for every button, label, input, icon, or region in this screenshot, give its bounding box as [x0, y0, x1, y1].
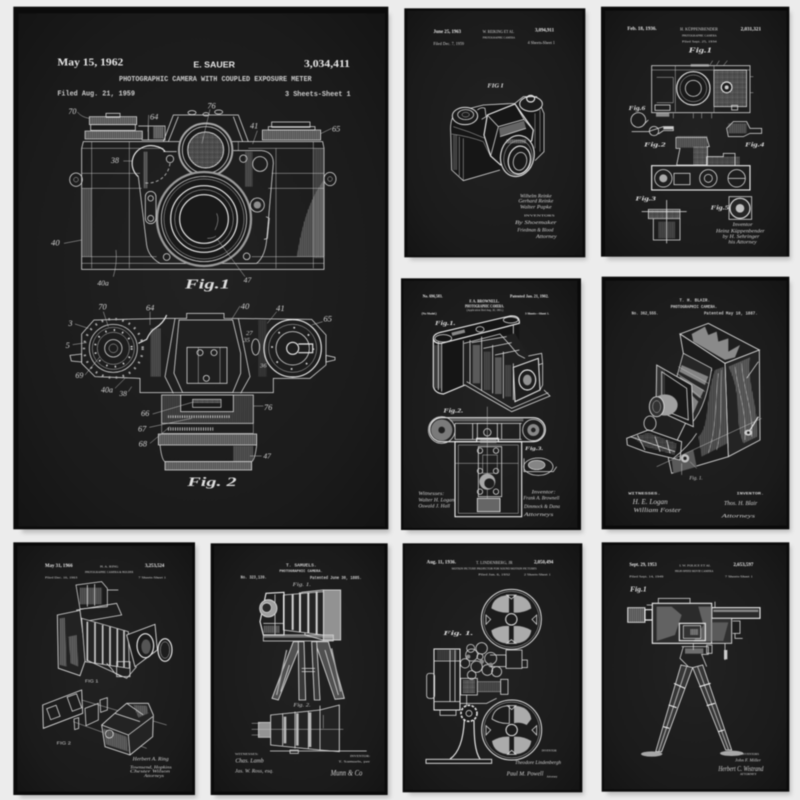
witnesses and inventor signatures: WITNESSES:: [235, 752, 258, 756]
top viewfinder: [76, 582, 122, 622]
poster: Reinke camera patent: [404, 8, 585, 257]
poster background: [405, 545, 580, 790]
patent header: 3,094,911: [535, 29, 554, 34]
figure 5 and inventor: Inventor: [731, 223, 753, 228]
figure 5 and inventor: Heinz Küppenbender: [715, 229, 765, 234]
patent header: T. SAMUELS.: [286, 562, 317, 568]
box camera drawing: [627, 323, 762, 481]
figure 1 callouts: 40a: [97, 278, 109, 287]
patent header: 2,050,494: [534, 560, 554, 565]
patent header: [241, 562, 362, 588]
patent header: [632, 297, 758, 317]
poster: Samuels tripod camera patent: [211, 543, 388, 795]
patent header: 3 Sheets-Sheet 1: [285, 91, 351, 99]
figure 1: folding camera: [433, 316, 550, 412]
figure 2 caption: Fig. 2: [186, 475, 238, 489]
witnesses and inventor signatures: Inventor:: [530, 489, 556, 495]
figure 2: camera section: [252, 703, 367, 753]
figure 2: top section: Fig.2.: [443, 409, 464, 415]
figure 2 callouts: 64: [146, 304, 154, 313]
poster background: [407, 11, 583, 256]
witnesses and inventor signatures: Chas. Lamb: [235, 758, 264, 765]
patent header: 3,253,524: [145, 564, 165, 569]
figure 2 callouts: 38: [118, 389, 127, 398]
rear housing: [102, 703, 153, 755]
film advance dial: [84, 319, 143, 378]
rewind dial top: [264, 320, 321, 377]
patent header: T. LINDENBERG, JR: [476, 561, 513, 566]
patent header: Filed Aug. 21, 1959: [57, 90, 135, 98]
front plate: [138, 151, 273, 263]
figure 4 part: Fig.4: [745, 142, 765, 149]
patent header: (No Model.): [422, 312, 437, 316]
patent header: PHOTOGRAPHIC CAMERA: [483, 36, 515, 40]
poster frame: [13, 7, 388, 529]
poster: Blair box camera patent: [602, 277, 789, 529]
figure 2 callouts: 66: [141, 409, 150, 418]
figure 2 callouts: 40a: [101, 386, 113, 395]
plate screws and controls: [145, 155, 269, 260]
top film reel: [481, 589, 541, 649]
figure 2 callouts: 36: [259, 363, 267, 370]
pull-out drawer: [627, 416, 682, 460]
pedestal and base: [426, 705, 492, 763]
patent header: I. W. POLICE ET AL: [679, 563, 711, 567]
patent header: MOTION PICTURE PROJECTOR FOR SOUND MOTION PICTURES: [452, 567, 537, 571]
patent header: Patented June 30, 1885.: [310, 576, 362, 581]
signatures: John F. Miller: [735, 758, 761, 763]
poster frame: [211, 543, 388, 795]
patent header: E. SAUER: [193, 59, 235, 69]
patent header: PHOTOGRAPHIC CAMERA.: [465, 304, 504, 308]
figure 2: top assembly: Fig.2: [644, 142, 667, 149]
patent header: PHOTOGRAPHIC CAMERA.: [671, 305, 717, 310]
figure 6 part: Fig.6: [629, 105, 646, 112]
patent header: 2 Sheets-Sheet 1: [524, 572, 551, 576]
movie camera body: [628, 598, 760, 757]
figure 2 callouts: 70: [98, 302, 107, 311]
figure 1: camera front view: [70, 110, 336, 269]
figure 2 callouts: 69: [75, 371, 83, 380]
patent header: [627, 27, 762, 55]
upper lens assembly: [490, 650, 527, 668]
prism faceplate: [484, 104, 533, 165]
sprocket cluster: [460, 643, 502, 679]
patent header: [427, 560, 554, 577]
witnesses and inventor signatures: Attorneys: [523, 512, 553, 518]
figure 1 callouts: [51, 101, 340, 287]
poster background: [17, 546, 192, 792]
figure 1: press camera: FIG 1: [85, 679, 99, 685]
figure 2 callouts: 5: [66, 341, 70, 350]
patent header: June 25, 1963: [433, 30, 461, 35]
figure 3: lens section: Fig.3: [635, 196, 657, 203]
exposure meter honeycomb: [179, 123, 232, 177]
viewfinder housing: [163, 110, 248, 151]
lamp house: [427, 649, 460, 715]
witnesses and inventor signatures: [235, 752, 371, 778]
bellows: [82, 618, 129, 668]
poster frame: [602, 542, 789, 792]
figure 2: top section: [428, 409, 545, 443]
lens barrel top view: [158, 395, 257, 470]
right rewind dial: [262, 122, 321, 140]
right dial: [520, 95, 542, 111]
patent header: H. KÜPPENBENDER: [680, 27, 719, 32]
box front with wood grain: [668, 334, 728, 473]
figure 1 callouts: 65: [332, 124, 340, 133]
patent header: [433, 29, 555, 89]
figure 2 callouts: 27: [246, 330, 253, 337]
patent header: Aug. 11, 1936.: [427, 560, 457, 565]
figure 3: lens section: [635, 196, 687, 243]
signatures: Wilhelm Reinke: [520, 194, 552, 199]
poster frame: [601, 7, 789, 257]
patent header: No. 362,555.: [632, 311, 658, 317]
patent header: 4 Sheets-Sheet 1: [528, 41, 555, 45]
signatures: Herbert A. Ring: [132, 758, 169, 763]
patent header: FIG I: [487, 83, 504, 89]
patent header: Fig.1: [630, 585, 647, 594]
signatures: Friedman & Blood: [516, 228, 554, 233]
figure 4 part: [727, 122, 765, 149]
box top with wood grain: [680, 323, 759, 363]
witnesses and inventor signatures: T. Samuels, per: [338, 759, 371, 764]
witnesses and inventor signatures: WITNESSES.: [628, 493, 661, 497]
signatures: [130, 758, 172, 778]
signatures: ATTORNEY: [740, 773, 757, 776]
patent header: Feb. 18, 1936.: [627, 27, 657, 32]
front standard and lens: [260, 592, 284, 635]
lens: [497, 132, 538, 180]
patent header: PHOTOGRAPHIC CAMERA & HOLDER: [85, 570, 133, 574]
patent header: [422, 294, 549, 316]
signatures: Gerhard Reinke: [518, 200, 554, 205]
figure 1 callouts: 64: [150, 112, 158, 121]
witnesses and inventor signatures: INVENTOR:: [350, 754, 370, 758]
witnesses and inventor signatures: Thos. H. Blair: [724, 500, 758, 507]
projector mechanism: [426, 631, 527, 763]
witnesses and inventor signatures: H. E. Logan: [632, 497, 668, 506]
figure 1 callouts: 70: [68, 107, 76, 116]
patent header: May 31, 1966: [45, 564, 73, 569]
figure 5 and inventor: by H. Sehringer: [723, 235, 760, 240]
patent header: (Application filed Aug. 20, 1901.): [467, 308, 503, 313]
patent header: [57, 57, 351, 99]
patent header: [45, 564, 166, 581]
patent header: Patented Jan. 21, 1902.: [510, 294, 549, 299]
patent header: No. 323,139.: [241, 576, 267, 581]
witnesses and inventor signatures: Jas. W. Ross, esq.: [235, 768, 273, 774]
lens barrel: [628, 608, 652, 622]
figure 4: detail: Fig.3.: [525, 446, 543, 452]
signatures: INVENTORS: [742, 753, 760, 756]
patent header: PHOTOGRAPHIC CAMERA: [682, 33, 717, 37]
poster frame: [602, 277, 789, 529]
signatures: Chester Wilson: [130, 769, 170, 774]
signatures: Attorney: [547, 775, 558, 779]
poster: E. Sauer camera patent: [13, 7, 388, 529]
signatures: Paul M. Powell: [506, 771, 544, 778]
signatures: INVENTORS: [524, 214, 555, 218]
witnesses and inventor signatures: Oswald J. Hall: [418, 504, 451, 509]
folding bed: [465, 382, 550, 412]
patent header: May 15, 1962: [57, 57, 124, 69]
patent header: PHOTOGRAPHIC CAMERA.: [279, 570, 323, 574]
tripod right leg: [693, 665, 743, 756]
front standard and lens: [649, 365, 693, 427]
patent header: HIGH-SPEED MOVIE CAMERA: [675, 569, 714, 573]
figure 1 callouts: 41: [250, 121, 258, 130]
witnesses and inventor signatures: William Foster: [633, 508, 682, 514]
figure 2: camera section: Fig. 2.: [292, 703, 311, 709]
patent header: F. A. BROWNELL.: [469, 298, 499, 303]
patent header: No. 696,583.: [423, 294, 443, 299]
figure 5 and inventor: [711, 197, 765, 245]
patent header: Filed Dec. 16, 1963: [45, 576, 78, 581]
patent header: Filed Dec. 7, 1959: [433, 42, 464, 47]
figure 2 callouts: 68: [139, 440, 148, 449]
figure 1 callouts: 38: [110, 156, 119, 165]
figure 5 and inventor: his Attorney: [728, 240, 758, 245]
bottom film reel: [482, 700, 542, 760]
tripod head: [680, 643, 712, 667]
poster background: [403, 281, 577, 528]
tripod left leg: [641, 665, 693, 757]
figure 2 callouts: 41: [276, 303, 285, 313]
signatures: Townsend, Hopkins: [130, 764, 172, 770]
poster: Lindenberg film projector patent: [403, 543, 582, 792]
signatures: Attorney: [535, 234, 557, 240]
signatures: [515, 194, 557, 240]
poster frame: [403, 543, 582, 792]
patent header: T. H. BLAIR.: [679, 297, 710, 303]
signatures: Herbert C. Wistrand: [718, 764, 764, 773]
figure 1 caption: Fig.1: [183, 277, 230, 292]
handle loop: [132, 146, 165, 177]
signatures: [506, 750, 561, 779]
patent header: Fig. 1.: [291, 582, 311, 588]
witnesses and inventor signatures: Walter H. Logan: [418, 498, 455, 504]
figure 4: detail: [524, 446, 557, 475]
main housing: [647, 598, 743, 660]
figure 2 callouts: 35: [242, 337, 251, 344]
patent header: Patented May 10, 1887.: [704, 311, 758, 317]
poster background: [605, 281, 787, 526]
figure 1 callouts: 47: [244, 275, 252, 284]
figure 1: press camera: [57, 582, 172, 685]
signatures: [718, 753, 764, 776]
figure 5 and inventor: Fig.5: [711, 204, 730, 211]
signatures: Theodore Lindenbergh: [515, 760, 561, 766]
signatures: Walter Papke: [520, 205, 553, 210]
poster background: [214, 546, 385, 792]
figure 2 callouts: 65: [323, 314, 333, 324]
camera perspective drawing: [451, 95, 544, 181]
poster: Ring camera patent: [13, 542, 195, 795]
figure 2 callouts: 3: [67, 319, 73, 328]
front lens board: [513, 353, 543, 402]
patent header: Filed Jan. 6, 1932: [478, 572, 510, 577]
witnesses and inventor signatures: Witnesses:: [418, 491, 445, 497]
patent header: 3,034,411: [304, 58, 350, 70]
figure 6 part: [629, 105, 673, 136]
patent header: [629, 563, 754, 594]
tripod legs: [272, 642, 344, 700]
bellows: [675, 353, 712, 423]
poster background: [604, 545, 787, 789]
figure 2 callouts: 47: [263, 451, 272, 460]
figure 2 callouts: 67: [138, 424, 147, 433]
poster frame: [404, 8, 585, 257]
patent header: PHOTOGRAPHIC CAMERA WITH COUPLED EXPOSURE METER: [119, 76, 312, 84]
projector mechanism: Fig. 1.: [443, 631, 474, 637]
poster frame: [13, 542, 195, 795]
patent header: 7 Sheets-Sheet 1: [725, 575, 753, 579]
poster: Kuppenbender camera patent: [601, 7, 789, 257]
figure 1: folding camera: Fig.1.: [435, 321, 456, 327]
figure 2 callouts: 76: [264, 403, 273, 412]
patent header: Filed Sept. 25, 1934: [682, 39, 717, 44]
witnesses and inventor signatures: INVENTOR.: [737, 493, 764, 497]
poster frame: [401, 278, 581, 530]
patent header: 7 Sheets-Sheet 1: [138, 576, 166, 580]
figure 1: camera front: [652, 61, 753, 118]
figure 3: camera back plan: [455, 407, 522, 517]
witnesses and inventor signatures: Frank A. Brownell: [522, 496, 560, 501]
witnesses and inventor signatures: [418, 489, 560, 518]
figure 2: camera top view: [66, 301, 335, 489]
figure 2: exploded view: [43, 690, 167, 755]
film magazine: [712, 608, 760, 618]
hatching on body: [151, 320, 267, 377]
figure 2 callouts: [66, 301, 333, 460]
witnesses and inventor signatures: Munn & Co: [330, 768, 363, 778]
patent header: W. REIKING ET AL: [483, 30, 515, 34]
lens: [157, 172, 251, 266]
witnesses and inventor signatures: Attorneys: [720, 513, 756, 519]
signatures: INVENTOR: [542, 750, 557, 753]
poster: Police high-speed movie camera patent: [602, 542, 789, 792]
patent header: Filed Sept. 14, 1949: [629, 575, 664, 580]
bellows: [283, 592, 323, 635]
patent header: 3 Sheets—Sheet 1.: [525, 312, 549, 316]
witnesses and inventor signatures: Dimmock & Dana: [523, 505, 560, 510]
left winding dial: [85, 113, 165, 140]
patent header: H. A. RING: [100, 564, 119, 568]
left dial: [452, 107, 486, 125]
lens board: [127, 624, 172, 667]
poster background: [18, 13, 385, 527]
box side with wood grain: [725, 350, 760, 457]
patent header: Fig.1: [689, 46, 712, 55]
patent header: 2,031,321: [741, 27, 762, 32]
signatures: Attorneys: [143, 773, 165, 778]
figure 1: camera on tripod: [260, 590, 344, 700]
figure 2: top assembly: [644, 136, 750, 190]
patent header: 2,653,597: [733, 563, 754, 568]
rear box: [302, 590, 341, 640]
poster: Brownell folding camera patent: [401, 278, 581, 530]
poster background: [605, 11, 787, 256]
figure 2: exploded view: FIG 2: [57, 740, 71, 746]
figure 1 callouts: 76: [207, 101, 216, 110]
figure 1 callouts: 40: [51, 238, 60, 248]
prism top and hot shoe: [165, 318, 260, 393]
patent header: Sept. 29, 1953: [629, 563, 657, 568]
bellows: [464, 333, 530, 400]
box camera drawing: Fig. 1.: [688, 476, 703, 481]
camera body: [57, 610, 86, 676]
signatures: By Shoemaker: [515, 221, 557, 226]
witnesses and inventor signatures: [628, 493, 764, 519]
figure 2 callouts: 40: [241, 301, 250, 311]
lower lens and sound head: [460, 678, 508, 707]
